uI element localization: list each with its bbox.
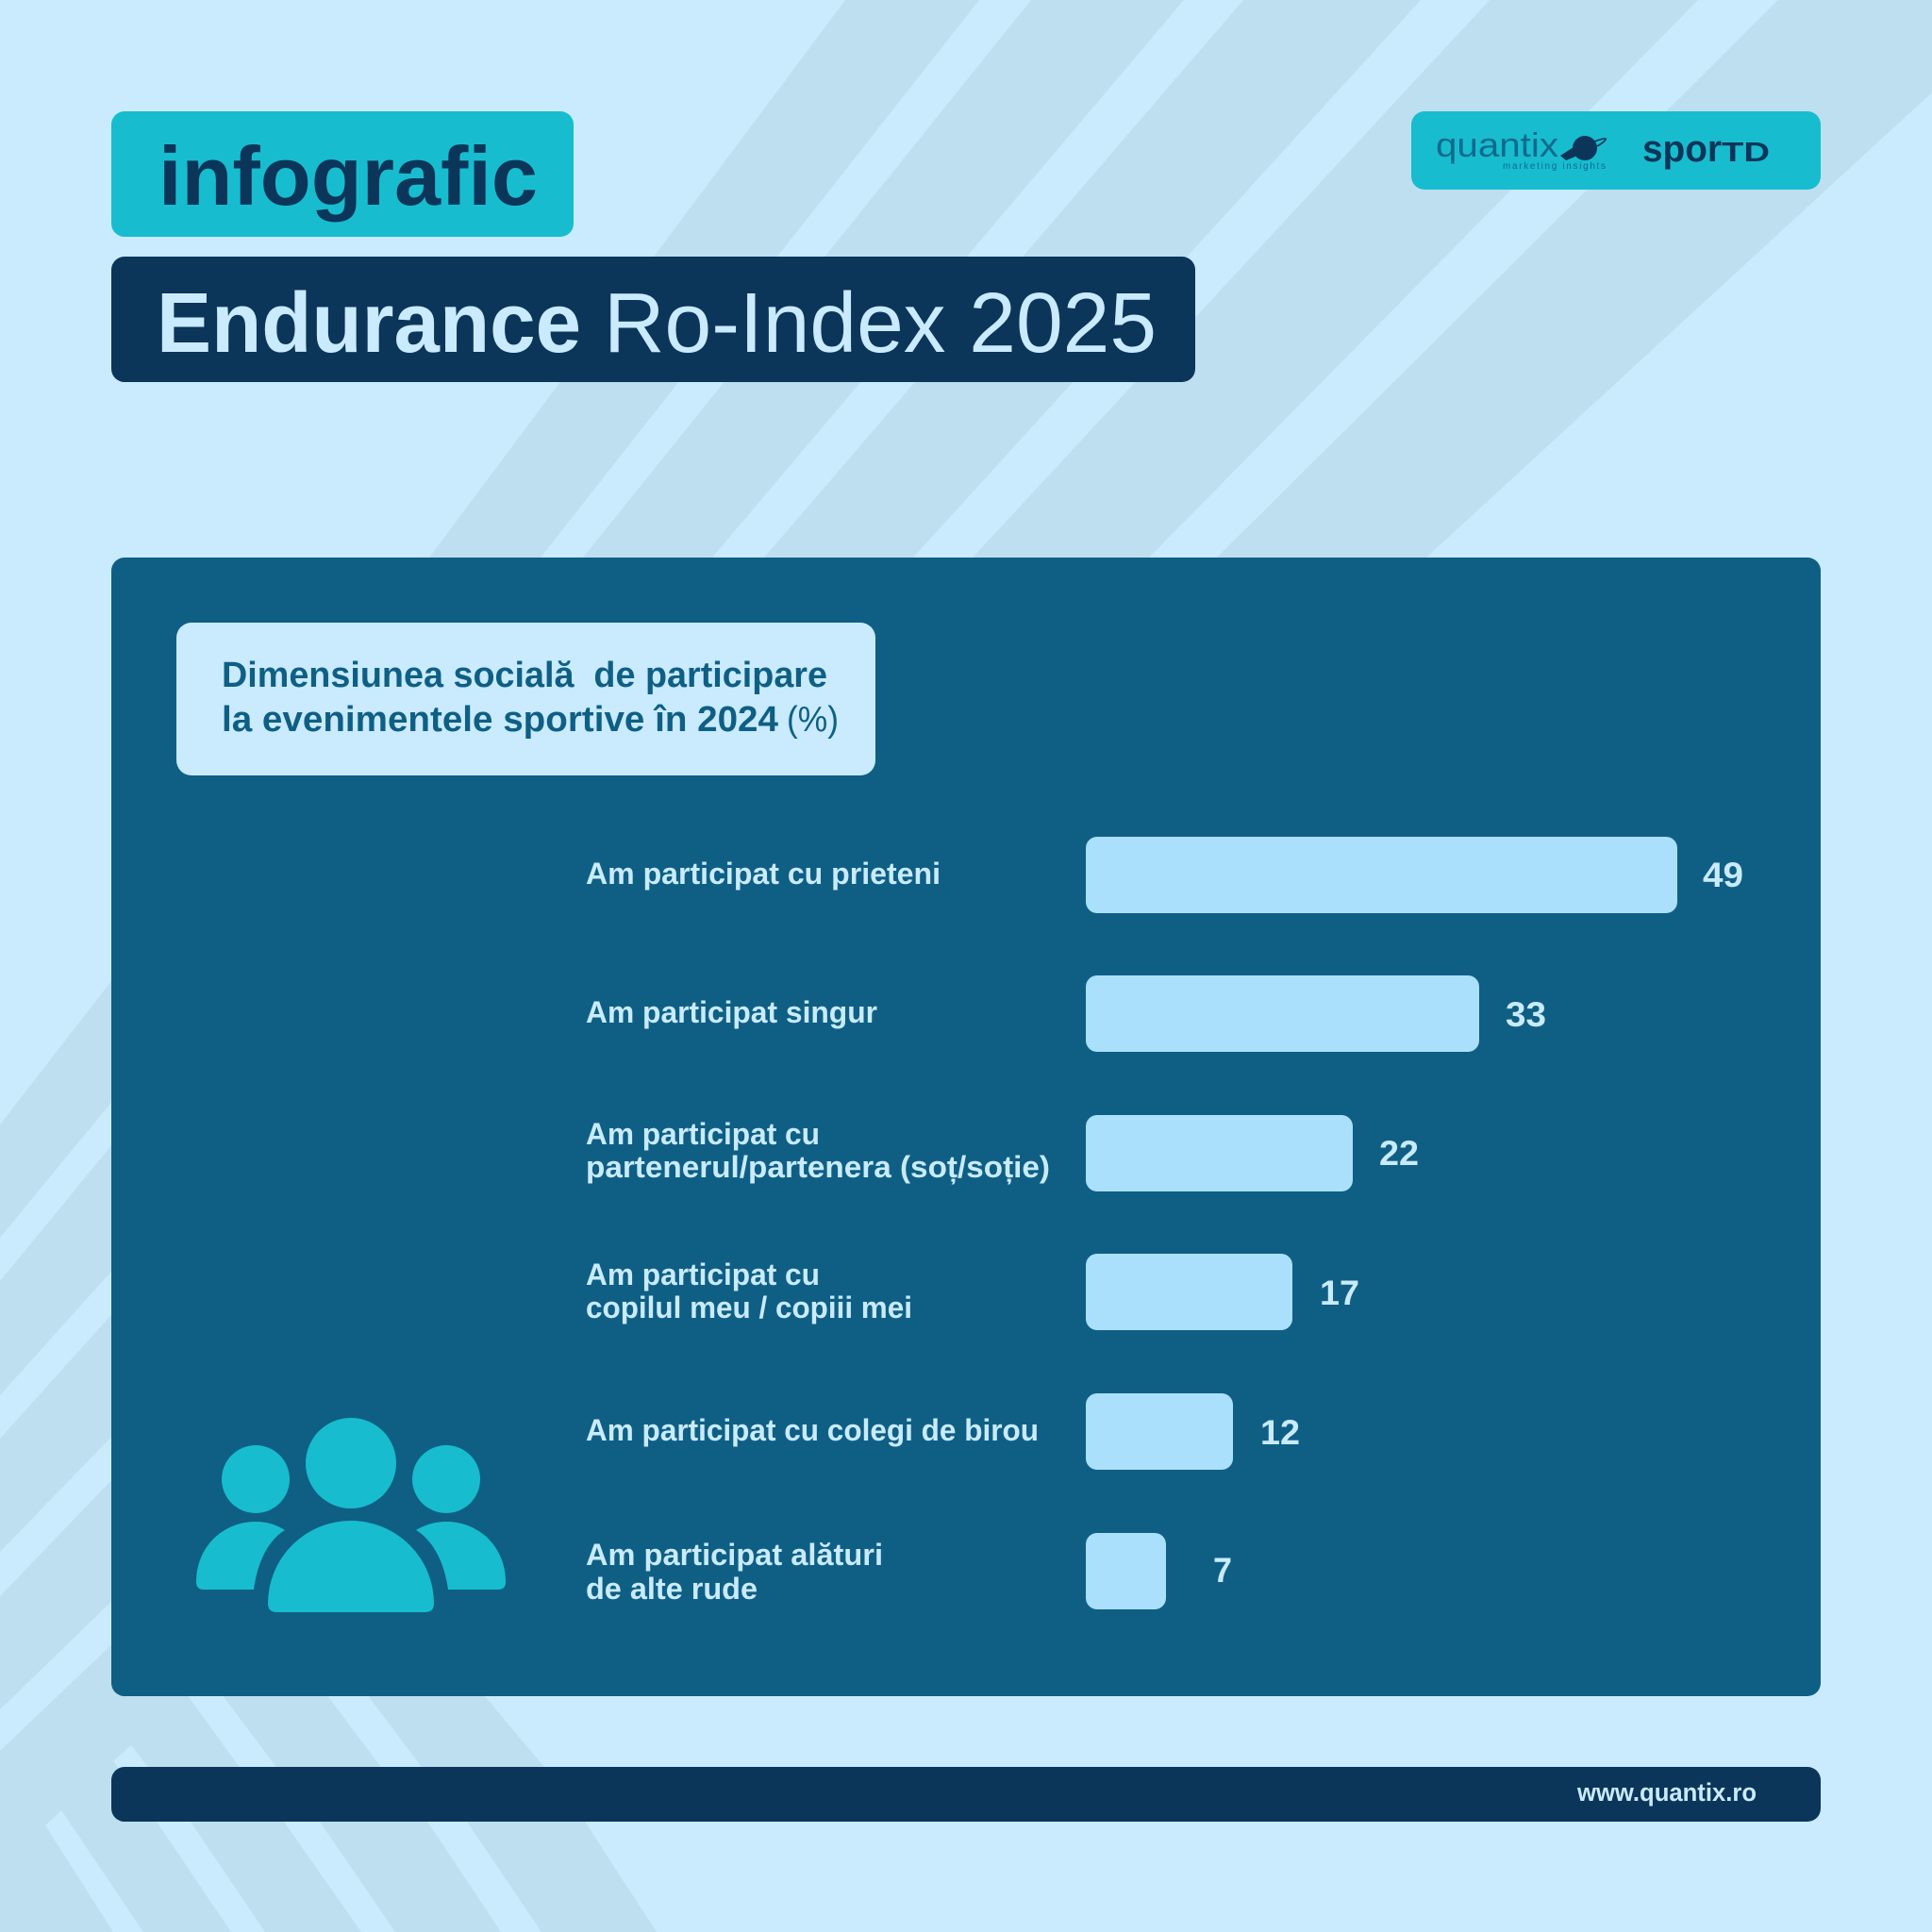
panel: main chart xyxy=(111,558,1821,1696)
chart heading: la evenimentele sportive în 2024 xyxy=(222,700,778,740)
row: partener 22: 22 xyxy=(1379,1134,1419,1173)
logo: sportTD xyxy=(1642,128,1770,170)
badge: infografic: infografic xyxy=(158,129,538,223)
row: prieteni 49 xyxy=(586,837,1743,913)
title: Endurance Ro-Index 2025: Endurance xyxy=(157,276,581,371)
row: singur 33: Am participat singur xyxy=(586,995,877,1029)
logo: sportTD: spor xyxy=(1642,128,1722,170)
row: colegi 12 xyxy=(586,1393,1300,1470)
logo: quantix: marketing insights xyxy=(1503,161,1606,172)
logo: sportTD: TD xyxy=(1722,138,1770,168)
row: rude 7: Am participat alături xyxy=(586,1538,883,1572)
row: prieteni 49: 49 xyxy=(1703,856,1743,894)
icon: group of people xyxy=(196,1418,506,1612)
row: partener 22 xyxy=(586,1115,1419,1191)
chart heading: Dimensiunea socială de participare xyxy=(222,656,827,695)
row: copii 17: Am participat cu xyxy=(586,1257,820,1291)
row: colegi 12: 12 xyxy=(1260,1413,1300,1452)
row: rude 7: de alte rude xyxy=(586,1572,758,1606)
row: colegi 12: Am participat cu colegi de birou xyxy=(586,1413,1039,1447)
row: singur 33 xyxy=(586,975,1546,1052)
row: prieteni 49: Am participat cu prieteni xyxy=(586,857,941,891)
row: copii 17: copilul meu / copiii mei xyxy=(586,1291,912,1324)
logo: quantix xyxy=(1436,125,1606,172)
row: rude 7 xyxy=(586,1533,1232,1609)
title: Endurance Ro-Index 2025 xyxy=(111,257,1195,382)
badge: infografic xyxy=(111,111,574,237)
chart heading: (%) xyxy=(787,700,839,740)
row: singur 33: 33 xyxy=(1506,995,1546,1034)
title: Endurance Ro-Index 2025: Ro-Index 2025 xyxy=(604,276,1157,371)
row: copii 17: 17 xyxy=(1320,1274,1359,1312)
row: rude 7: 7 xyxy=(1213,1551,1232,1590)
footer bar xyxy=(111,1767,1821,1822)
row: copii 17 xyxy=(586,1254,1359,1330)
footer bar: www.quantix.ro xyxy=(1576,1778,1757,1807)
row: partener 22: Am participat cu xyxy=(586,1117,820,1151)
logos panel xyxy=(1411,111,1821,190)
row: partener 22: partenerul/partenera (soț/soție) xyxy=(586,1150,1050,1184)
logo: quantix: quantix xyxy=(1436,125,1558,164)
chart heading xyxy=(176,623,875,775)
